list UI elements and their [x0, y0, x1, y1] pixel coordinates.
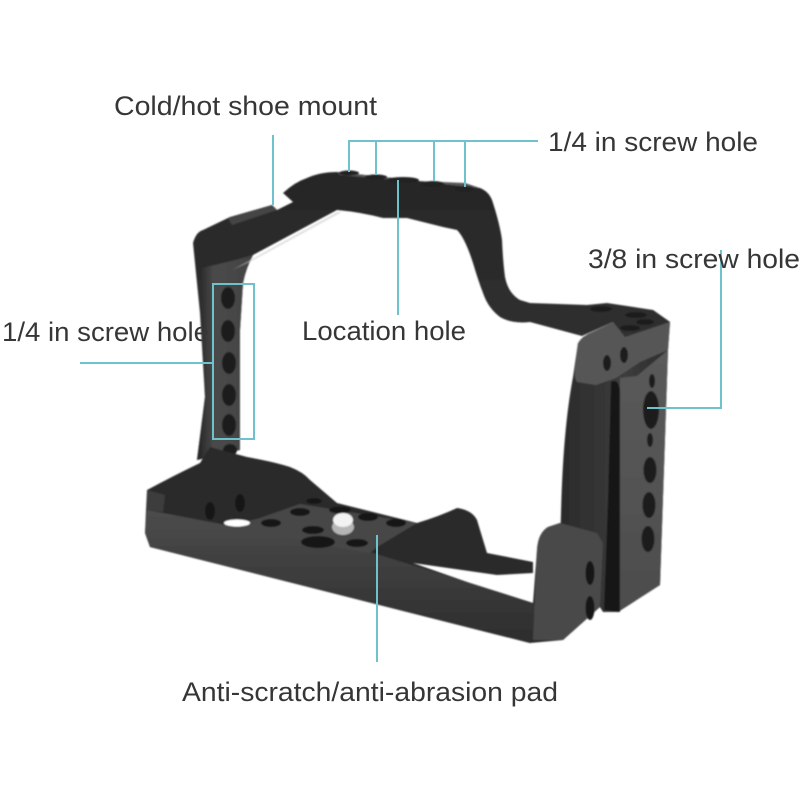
label: cold/hot shoe mount: Cold/hot shoe mount	[114, 91, 378, 121]
plate screw holes	[205, 494, 594, 620]
line: anti-scratch pad	[376, 535, 378, 662]
bottom opening	[224, 520, 250, 526]
camera cage product photo	[145, 170, 670, 643]
callout lines	[80, 135, 721, 662]
label: location hole: Location hole	[302, 316, 466, 346]
label: left 1/4 in screw hole: 1/4 in screw hole	[2, 317, 209, 347]
grip screw holes	[603, 347, 659, 552]
cage: top arc and left column	[193, 170, 670, 460]
label: anti-scratch/anti-abrasion pad: Anti-scratch/anti-abrasion pad	[182, 677, 558, 707]
label: top 1/4 in screw hole: 1/4 in screw hole	[548, 127, 758, 157]
corner screw holes	[590, 306, 654, 331]
line: top screw holes bracket	[349, 141, 538, 187]
cage: right grip	[560, 310, 670, 612]
line: 3/8 in screw hole	[647, 250, 721, 408]
line: left screw hole box	[80, 284, 254, 439]
quarter-inch mounting screw	[332, 513, 354, 535]
line: cold/hot shoe mount	[272, 135, 274, 205]
line: location hole	[397, 180, 399, 315]
top screw holes	[339, 170, 475, 192]
left column screw holes	[221, 287, 237, 456]
label: 3/8 in screw hole: 3/8 in screw hole	[588, 244, 800, 274]
cage: bottom plate	[145, 447, 603, 643]
